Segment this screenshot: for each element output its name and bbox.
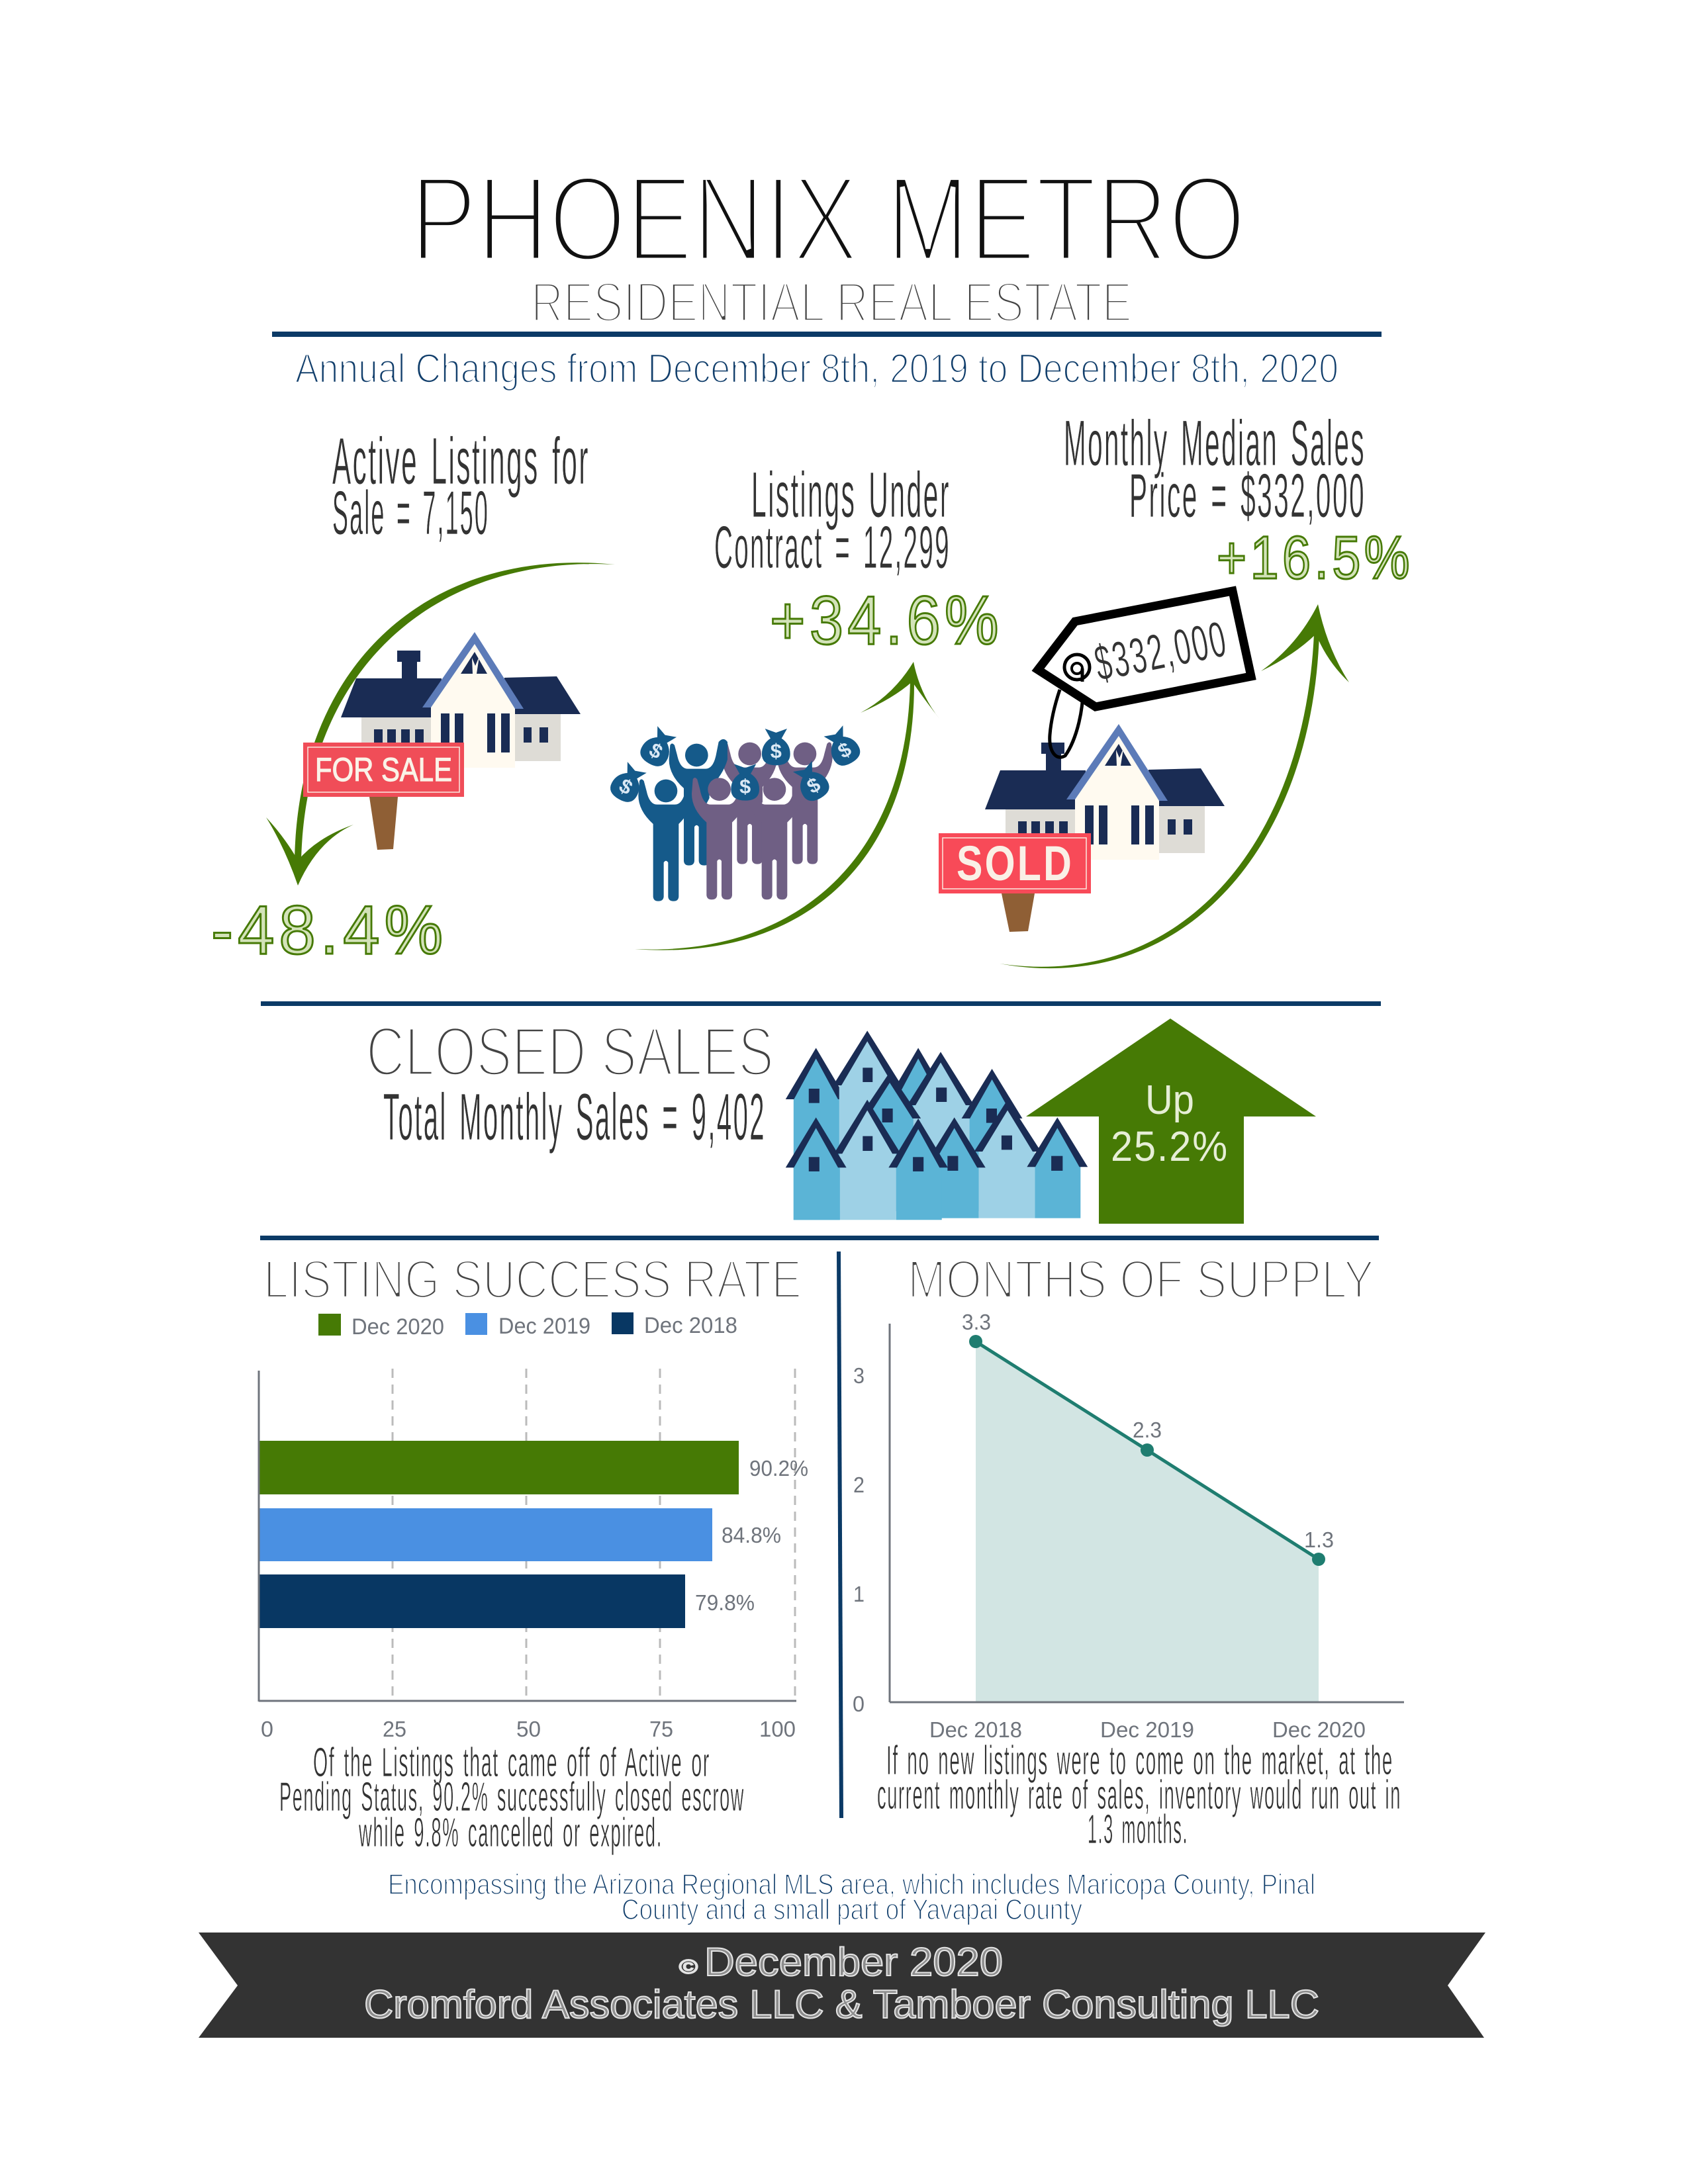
money bags: $ — [834, 738, 855, 763]
icon: for sale sign — [303, 743, 464, 850]
icon: house sold — [985, 724, 1225, 860]
icon: sold sign: SOLD — [957, 836, 1074, 891]
area line chart: Dec 2020 — [1272, 1717, 1366, 1742]
under contract change: +34.6% — [770, 582, 1003, 659]
icon: house for sale — [341, 632, 581, 768]
footer credits — [364, 1940, 1319, 2026]
arrow: up 25.2%: 25.2% — [1111, 1122, 1229, 1170]
panel: listing success rate: Of the Listings that came off of Active or — [313, 1740, 710, 1786]
listing success heading: LISTING SUCCESS RATE — [263, 1250, 802, 1310]
months of supply caption — [877, 1738, 1401, 1852]
area line chart: 3.3 — [962, 1310, 991, 1334]
panel: listings under contract — [606, 459, 1003, 950]
arrow: up 25.2% — [1026, 1019, 1316, 1224]
icon: price tag — [1038, 591, 1251, 757]
active listings change: -48.4% — [211, 892, 447, 969]
arrow: up — [1000, 604, 1349, 968]
chart legend — [318, 1312, 737, 1340]
icon: price tag: $332,000 — [1090, 611, 1232, 692]
money bags — [606, 724, 864, 806]
back purple figures — [722, 742, 833, 864]
money bags: $ — [645, 739, 667, 764]
panel: active listings — [211, 424, 615, 969]
panel: listings under contract: Contract = 12,299 — [714, 514, 951, 581]
bar chart: 50 — [516, 1717, 541, 1741]
coverage note — [388, 1868, 1315, 1926]
panel: listings under contract: Listings Under — [751, 459, 951, 531]
listing success caption — [279, 1740, 745, 1856]
money bags: $ — [615, 774, 636, 799]
subtitle: RESIDENTIAL REAL ESTATE — [531, 271, 1132, 334]
area line chart: 2 — [853, 1473, 865, 1497]
median price change: +16.5% — [1217, 524, 1413, 592]
closed sales heading: CLOSED SALES — [366, 1013, 774, 1091]
chart legend: Dec 2019 — [498, 1314, 590, 1339]
footer banner — [199, 1933, 1485, 2038]
coverage note: Encompassing the Arizona Regional MLS area, which includes Maricopa County, Pinal — [388, 1868, 1315, 1901]
panel: closed sales — [366, 1013, 1316, 1224]
area line chart — [853, 1310, 1404, 1742]
icon: sold sign — [939, 833, 1091, 932]
active listings label: Sale = 7,150 — [332, 478, 489, 547]
area line chart: Dec 2018 — [929, 1717, 1022, 1742]
text: Pending Status, 90.2% successfully closed escrow — [279, 1774, 745, 1820]
bar chart: 90.2% — [749, 1456, 808, 1480]
footer credits: © — [679, 1956, 698, 1978]
listing success caption: while 9.8% cancelled or expired. — [359, 1810, 663, 1856]
under contract label — [714, 459, 951, 581]
arrow: up 25.2%: Up — [1145, 1077, 1194, 1123]
footer credits: December 2020 — [704, 1940, 1003, 1984]
arrow: down — [266, 563, 615, 886]
panel: listing success rate — [259, 1250, 808, 1856]
months of supply caption: 1.3 months. — [1088, 1807, 1188, 1852]
arrow: up — [635, 662, 940, 950]
money bags: $ — [771, 740, 782, 762]
title: PHOENIX METRO — [410, 150, 1246, 287]
area line chart: 3 — [853, 1363, 865, 1388]
money bags: $ — [739, 775, 751, 797]
months of supply heading: MONTHS OF SUPPLY — [908, 1250, 1374, 1310]
icon: for sale sign: FOR SALE — [315, 751, 452, 788]
panel: months of supply — [853, 1250, 1404, 1852]
area line chart: 0 — [853, 1692, 865, 1716]
front blue figures — [638, 739, 727, 901]
area line chart: 1.3 — [1304, 1527, 1334, 1552]
bar chart: 79.8% — [695, 1590, 755, 1615]
area line chart: 1 — [853, 1582, 865, 1606]
panel: median sales price: Price = $332,000 — [1129, 461, 1366, 530]
chart legend: Dec 2018 — [644, 1313, 737, 1338]
bar chart: 0 — [261, 1717, 273, 1741]
bar chart: 100 — [759, 1717, 796, 1741]
money bags: $ — [803, 773, 824, 798]
active listings label — [332, 424, 590, 547]
icon: neighbourhood houses — [786, 1030, 1088, 1220]
bar chart: 84.8% — [722, 1523, 781, 1547]
coverage note: County and a small part of Yavapai County — [622, 1893, 1082, 1926]
area line chart: Dec 2019 — [1100, 1717, 1194, 1742]
icon: people with money bags — [606, 724, 864, 901]
panel: closed sales: Total Monthly Sales = 9,402 — [383, 1080, 766, 1154]
area line chart: 2.3 — [1133, 1418, 1162, 1442]
bar chart: 25 — [383, 1717, 406, 1741]
bar chart — [259, 1369, 808, 1741]
text: Active Listings for — [332, 424, 590, 498]
chart legend: Dec 2020 — [352, 1314, 444, 1340]
front purple figures — [692, 778, 802, 899]
panel: median sales price — [939, 407, 1413, 968]
date range: Annual Changes from December 8th, 2019 to December 8th, 2020 — [295, 346, 1338, 392]
bar chart: 75 — [649, 1717, 673, 1741]
median price label — [1064, 407, 1366, 530]
footer credits: Cromford Associates LLC & Tamboer Consulting LLC — [364, 1982, 1319, 2026]
